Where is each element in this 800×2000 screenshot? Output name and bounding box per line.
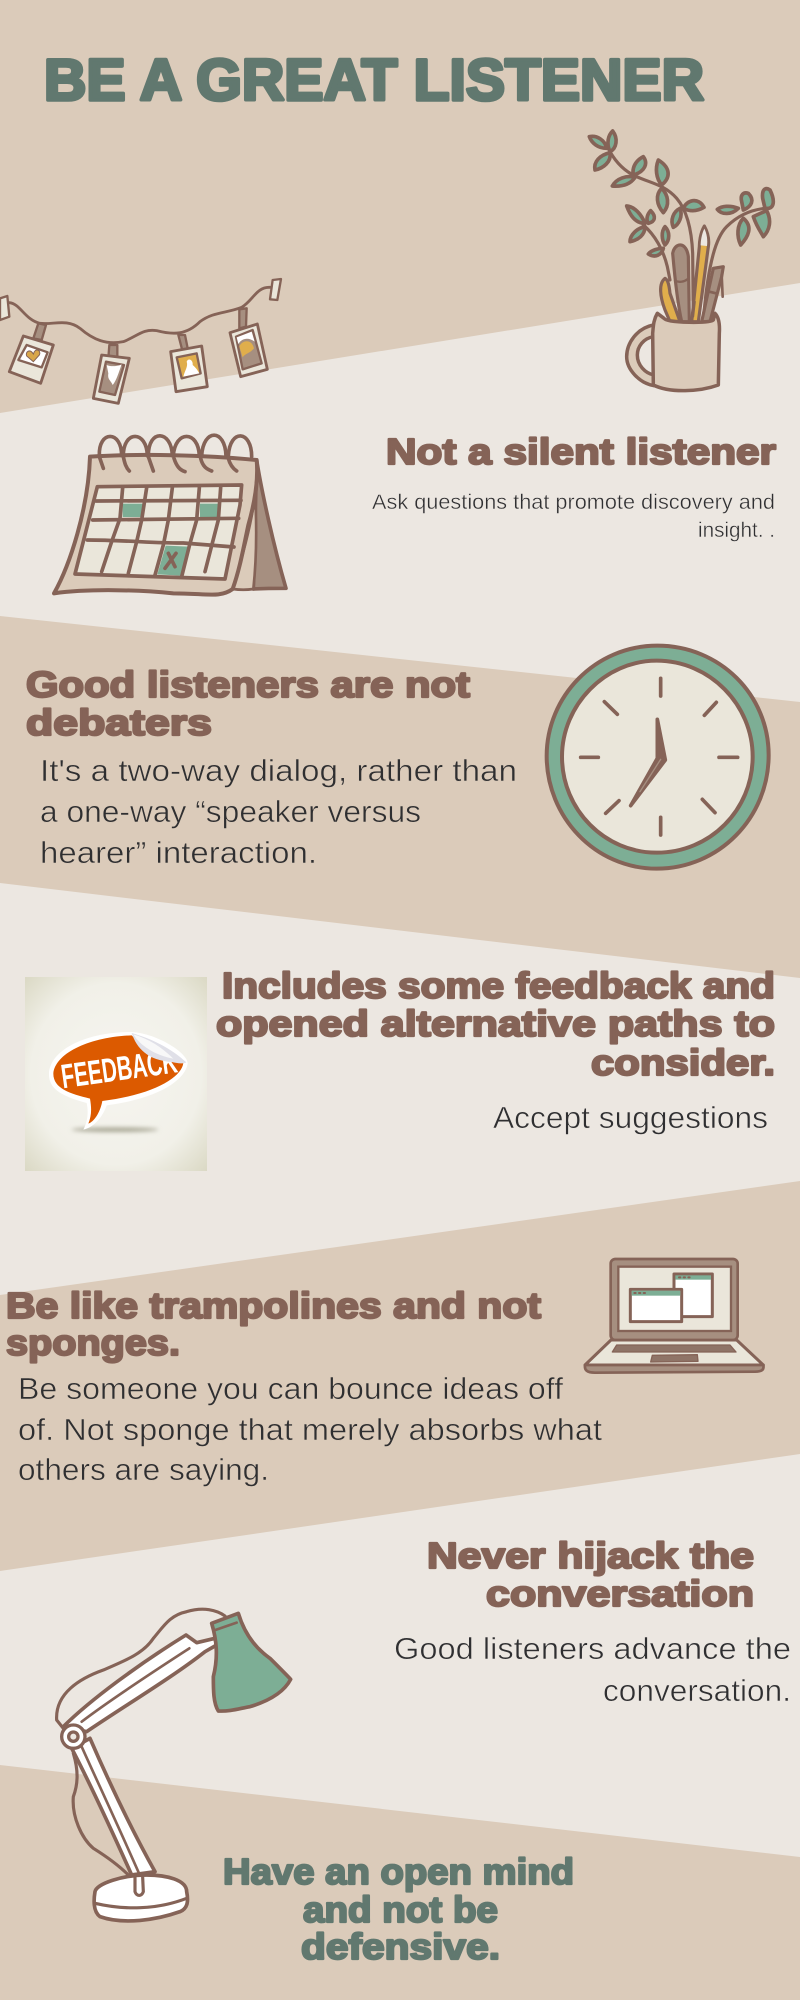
- laptop screen: [611, 1259, 738, 1340]
- clock hands: [631, 719, 665, 806]
- heading: includes some feedback: opened alternative paths to: [216, 1003, 775, 1044]
- heading: be like trampolines: sponges.: [6, 1322, 180, 1363]
- heading: have an open mind: defensive.: [301, 1926, 500, 1967]
- heading: have an open mind: [223, 1851, 574, 1967]
- lamp upper arm: [63, 1635, 217, 1732]
- heading: not a silent listener: Not a silent listener: [386, 431, 776, 472]
- icon: photo garland: [0, 279, 281, 403]
- photo: figure: [93, 345, 129, 403]
- text: accept suggestions: Accept suggestions: [493, 1100, 768, 1135]
- heading: good listeners are not debaters: [26, 664, 470, 743]
- text: ask questions: insight. .: [698, 518, 775, 542]
- photo: silhouette: [171, 335, 207, 392]
- pens: [661, 226, 723, 322]
- heading: have an open mind: Have an open mind: [223, 1851, 574, 1892]
- icon: wall clock: [547, 646, 769, 869]
- title: BE A GREAT LISTENER: [44, 48, 704, 113]
- text: bounce ideas: [18, 1371, 602, 1487]
- rings: [99, 435, 252, 472]
- lamp base: [94, 1875, 188, 1921]
- heading: never hijack the conversation: [427, 1535, 754, 1614]
- text: two-way dialog: It's a two-way dialog, rather than: [40, 753, 517, 788]
- laptop base: [585, 1340, 764, 1373]
- heading: includes some feedback: Includes some feedback and: [222, 965, 775, 1006]
- clock ticks: [581, 678, 738, 835]
- heading: have an open mind: and not be: [303, 1889, 498, 1930]
- image: feedback speech bubble: [25, 977, 207, 1171]
- photo: sunset: [230, 308, 267, 377]
- text: advance the conversation: conversation.: [603, 1673, 791, 1708]
- text: advance the conversation: [394, 1631, 791, 1708]
- text: bounce ideas: Be someone you can bounce ideas off: [18, 1371, 563, 1406]
- text: ask questions: [372, 490, 775, 542]
- text: two-way dialog: a one-way “speaker versus: [40, 794, 421, 829]
- heading: includes some feedback: consider.: [591, 1042, 775, 1083]
- text: advance the conversation: Good listeners advance the: [394, 1631, 791, 1666]
- lamp cord: [57, 1609, 225, 1875]
- back flap: [233, 460, 286, 590]
- text: bounce ideas: of. Not sponge that merely absorbs what: [18, 1412, 602, 1447]
- icon: mug with pencils and plant: [589, 131, 773, 391]
- heading: be like trampolines: Be like trampolines and not: [6, 1285, 541, 1326]
- photo: heart: [9, 323, 53, 383]
- lamp joint: [62, 1725, 85, 1748]
- icon: desk lamp: [57, 1609, 291, 1921]
- icon: laptop: [585, 1259, 764, 1373]
- heading: good listeners are not debaters: Good listeners are not: [26, 664, 470, 705]
- leaves: [589, 131, 773, 256]
- heading: includes some feedback: [216, 965, 775, 1083]
- mug: [627, 313, 719, 391]
- heading: good listeners are not debaters: debaters: [26, 702, 212, 743]
- text: two-way dialog: [40, 753, 517, 870]
- text: bounce ideas: others are saying.: [18, 1452, 269, 1487]
- heading: be like trampolines: [6, 1285, 541, 1363]
- heading: never hijack the conversation: conversation: [486, 1573, 754, 1614]
- image: feedback speech bubble: FEEDBACK: [59, 1042, 180, 1096]
- page: [54, 455, 257, 595]
- plant stems: [610, 152, 765, 320]
- heading: never hijack the conversation: Never hijack the: [427, 1535, 754, 1576]
- lamp shade: [212, 1613, 291, 1711]
- icon: desk calendar: [54, 435, 286, 595]
- text: ask questions: Ask questions that promote discovery and: [372, 490, 775, 514]
- text: two-way dialog: hearer” interaction.: [40, 835, 317, 870]
- date grid: [75, 485, 242, 579]
- browser windows: [630, 1274, 712, 1322]
- lamp lower arm: [72, 1738, 155, 1875]
